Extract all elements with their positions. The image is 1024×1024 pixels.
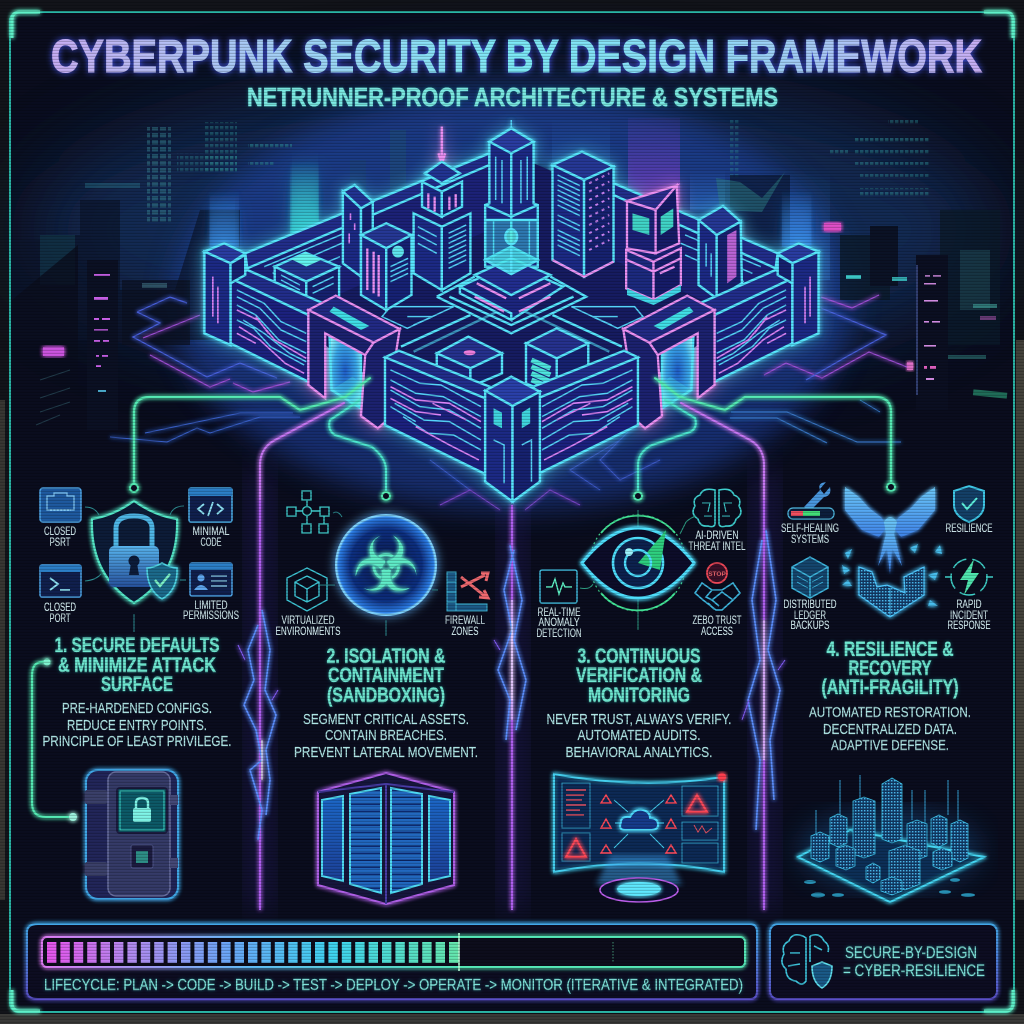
heading: 2. ISOLATION & xyxy=(326,645,446,668)
heading xyxy=(54,634,220,696)
plaza block left xyxy=(437,337,502,387)
connector: green to section 4 xyxy=(655,378,891,482)
description: ADAPTIVE DEFENSE. xyxy=(831,737,949,754)
heading: (ANTI-FRAGILITY) xyxy=(822,676,958,699)
labels: MINIMAL xyxy=(192,526,230,538)
labels: ACCESS xyxy=(701,626,733,638)
central hologram pyramid xyxy=(460,220,563,320)
heading: SURFACE xyxy=(101,673,173,696)
panel: section 3 verification xyxy=(536,489,746,902)
panel: section 2 isolation xyxy=(276,491,488,904)
cyan beam xyxy=(290,160,319,260)
description: BEHAVIORAL ANALYTICS. xyxy=(566,744,712,761)
heading: VERIFICATION & xyxy=(576,664,702,687)
plaza block right xyxy=(526,328,588,397)
subtitle: NETRUNNER-PROOF ARCHITECTURE & SYSTEMS xyxy=(247,82,778,112)
heading xyxy=(576,645,702,707)
description: PRE-HARDENED CONFIGS. xyxy=(62,700,212,717)
background skyline left xyxy=(12,122,406,430)
left mid building xyxy=(361,223,411,310)
connector: green to section 2 xyxy=(329,400,386,490)
summary text: SECURE-BY-DESIGN xyxy=(845,943,977,962)
labels: RAPID xyxy=(956,599,982,611)
labels: DETECTION xyxy=(536,628,582,640)
icon: brain with shield xyxy=(782,935,832,988)
lightning dividers xyxy=(238,500,785,910)
labels: RESILIENCE xyxy=(946,523,993,535)
description: DECENTRALIZED DATA. xyxy=(823,721,957,738)
icon: pulse monitor xyxy=(540,570,577,603)
icon: rapid response bolt xyxy=(945,559,993,595)
icon: brain xyxy=(693,489,741,527)
connector lines to icons xyxy=(85,506,186,632)
illustration: armored vault xyxy=(85,770,178,899)
labels: LIMITED xyxy=(194,600,228,612)
slanted magenta tower xyxy=(626,186,681,305)
icon: stop sign xyxy=(707,563,727,583)
icon: handshake xyxy=(695,583,740,610)
labels: ENVIRONMENTS xyxy=(276,626,341,638)
cube with beam xyxy=(275,253,339,317)
labels: DISTRIBUTED xyxy=(784,599,836,611)
description: NEVER TRUST, ALWAYS VERIFY. xyxy=(546,711,732,728)
labels: RESPONSE xyxy=(948,620,991,632)
tall data tower xyxy=(552,152,614,277)
description: AUTOMATED AUDITS. xyxy=(578,727,700,744)
icon: firewall zones xyxy=(447,572,488,611)
left wing: pillar, wall, gate xyxy=(204,243,494,474)
connector: green to section 1 xyxy=(134,378,370,484)
labels: INCIDENT xyxy=(950,610,988,622)
description xyxy=(42,700,232,750)
green and purple connectors xyxy=(32,378,895,821)
icon: biohazard sphere xyxy=(336,515,436,615)
heading: RECOVERY xyxy=(848,657,932,680)
connector: purple gate to column 1 xyxy=(260,403,344,500)
heading: 1. SECURE DEFAULTS xyxy=(54,634,220,657)
labels: ZONES xyxy=(452,626,479,638)
labels: ZEBO TRUST xyxy=(692,615,742,627)
icon: biohazard sphere: ☣ xyxy=(352,520,420,609)
icon: stop sign: STOP xyxy=(708,571,726,578)
background skyline right xyxy=(552,118,1007,410)
connector: green to section 3 xyxy=(638,400,696,490)
heading: 4. RESILIENCE & xyxy=(826,638,954,661)
heading: (SANDBOXING) xyxy=(327,684,445,707)
labels: CODE xyxy=(200,537,222,549)
labels: LEDGER xyxy=(794,610,826,622)
description xyxy=(809,704,971,754)
labels xyxy=(44,526,239,625)
heading: 3. CONTINUOUS xyxy=(578,645,700,668)
labels xyxy=(781,523,993,632)
isometric fortress city xyxy=(204,120,819,502)
labels xyxy=(276,615,485,638)
heading: MONITORING xyxy=(588,684,690,707)
blue pillars of light xyxy=(209,190,811,247)
lifecycle caption: LIFECYCLE: PLAN -> CODE -> BUILD -> TEST -> DEPLOY -> OPERATE -> MONITOR (ITERATIVE & INTEGRATED) xyxy=(44,977,743,994)
illustration: server cube xyxy=(318,773,454,904)
labels xyxy=(536,530,746,640)
heading: & MINIMIZE ATTACK xyxy=(58,654,216,677)
icon: resilience shield xyxy=(954,486,984,522)
panel: section 4 resilience xyxy=(781,482,993,902)
spire tower xyxy=(414,127,470,290)
icon: radar eye xyxy=(582,510,694,612)
front corner pillar xyxy=(485,377,540,502)
heading: CONTAINMENT xyxy=(328,664,444,687)
icon: ledger cube xyxy=(792,557,828,598)
labels: PERMISSIONS xyxy=(183,610,239,622)
right small tower xyxy=(699,206,742,298)
labels: CLOSED xyxy=(44,602,76,614)
icon: terminal xyxy=(40,565,81,597)
labels: BACKUPS xyxy=(790,620,830,632)
progress bar xyxy=(42,933,745,971)
skinny tower xyxy=(343,185,373,277)
panel: secure by design summary xyxy=(770,924,997,999)
icon: virtual cube xyxy=(287,568,327,611)
description xyxy=(294,711,478,761)
summary text xyxy=(843,943,985,980)
labels: ANOMALY xyxy=(538,617,580,629)
labels: SYSTEMS xyxy=(791,534,829,546)
description: AUTOMATED RESTORATION. xyxy=(809,704,971,721)
icon: network nodes xyxy=(287,491,329,533)
labels: PSRT xyxy=(50,537,70,549)
panel: lifecycle bar xyxy=(27,924,757,999)
heading xyxy=(326,645,446,707)
icon: shield with padlock xyxy=(92,501,177,603)
labels: CLOSED xyxy=(44,526,76,538)
road grid on floor xyxy=(382,277,643,352)
illustration: hologram dashboard xyxy=(554,773,726,902)
icon: phoenix rising from broken block xyxy=(842,487,942,617)
illustration: rebuilt digital city xyxy=(798,775,984,902)
labels: PORT xyxy=(50,613,70,625)
labels: REAL-TIME xyxy=(538,607,581,619)
central tower xyxy=(485,120,538,267)
description xyxy=(546,711,732,761)
ground circuit traces xyxy=(110,295,907,510)
summary text: = CYBER-RESILIENCE xyxy=(843,961,985,980)
labels: SELF-HEALING xyxy=(781,523,839,535)
icon: minimal code xyxy=(189,488,232,522)
labels: VIRTUALIZED xyxy=(282,615,334,627)
labels: THREAT INTEL xyxy=(688,541,746,553)
back walls xyxy=(245,153,778,333)
panel: section 1 secure defaults xyxy=(40,488,239,899)
icon: limited permissions xyxy=(190,563,232,596)
connector: purple gate to column 4 xyxy=(681,403,764,500)
icon: closed port xyxy=(40,488,81,522)
connector: vault link xyxy=(32,658,77,821)
description: REDUCE ENTRY POINTS. xyxy=(67,717,207,734)
labels: AI-DRIVEN xyxy=(696,530,738,542)
labels: FIREWALL xyxy=(445,615,485,627)
description: CONTAIN BREACHES. xyxy=(325,727,447,744)
right wing mirrored xyxy=(529,243,819,474)
description: PRINCIPLE OF LEAST PRIVILEGE. xyxy=(42,733,232,750)
description: SEGMENT CRITICAL ASSETS. xyxy=(303,711,469,728)
fortress floor xyxy=(231,153,792,480)
icon: wrench and status bar xyxy=(788,482,834,519)
description: PREVENT LATERAL MOVEMENT. xyxy=(294,744,478,761)
heading xyxy=(822,638,958,699)
